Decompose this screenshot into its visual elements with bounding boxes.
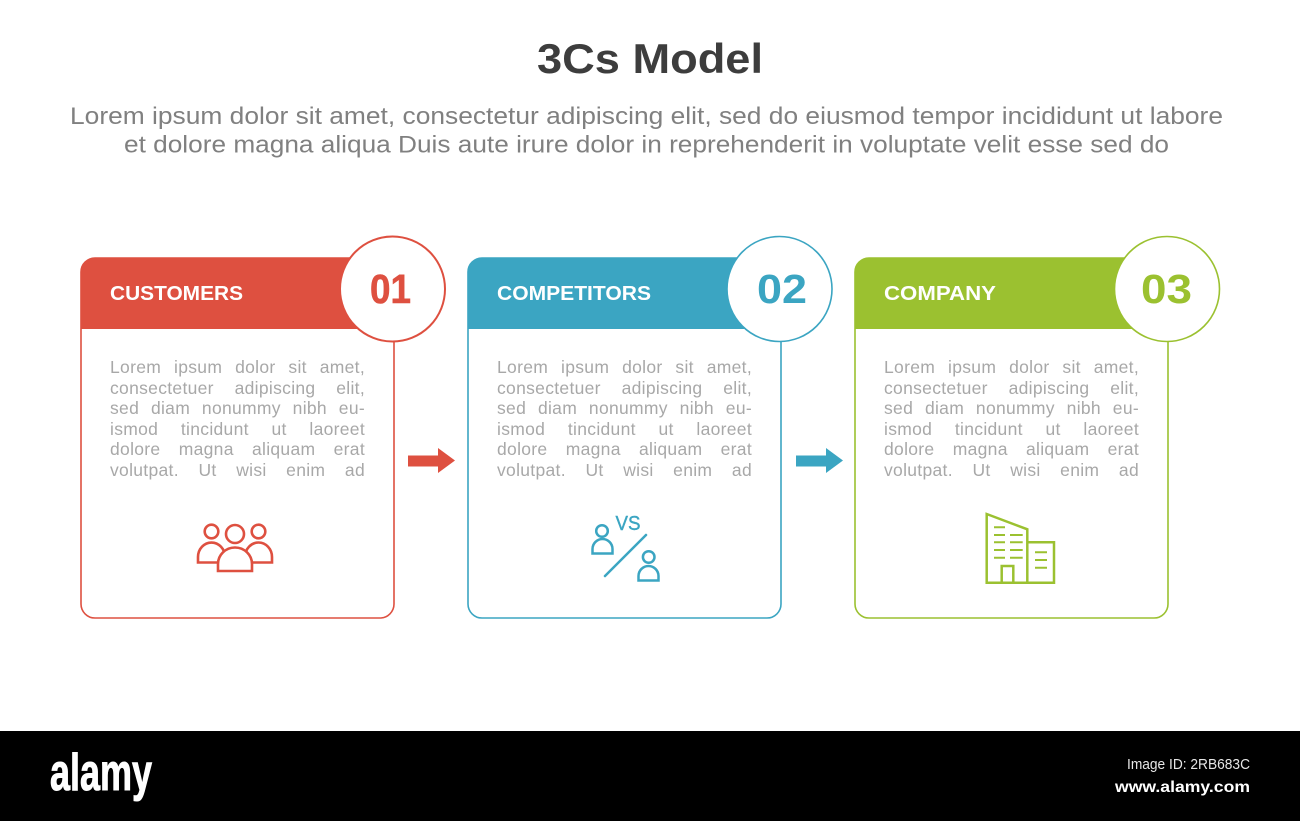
company body text	[884, 357, 1139, 480]
panel: company: COMPANY	[884, 282, 996, 305]
competitors body text: Lorem ipsum dolor sit amet,	[497, 357, 752, 377]
arrow: customers to competitors	[408, 448, 455, 473]
panel: customers: CUSTOMERS	[110, 282, 243, 305]
subtitle text block: Lorem ipsum dolor sit amet, consectetur adipiscing elit, sed do eiusmod tempor incididunt ut labore	[70, 103, 1223, 130]
panel: company: 03	[1141, 266, 1192, 312]
competitors body text: volutpat. Ut wisi enim ad	[497, 460, 752, 480]
subtitle text block: et dolore magna aliqua Duis aute irure dolor in reprehenderit in voluptate velit esse sed do	[124, 132, 1169, 158]
competitors body text	[497, 357, 752, 480]
competitors body text: sed diam nonummy nibh eu-	[497, 398, 752, 418]
company body text: Lorem ipsum dolor sit amet,	[884, 357, 1139, 377]
company body text: sed diam nonummy nibh eu-	[884, 398, 1139, 418]
customers body text: sed diam nonummy nibh eu-	[110, 398, 365, 418]
customers body text: volutpat. Ut wisi enim ad	[110, 460, 365, 480]
panel: customers: 01	[370, 266, 411, 312]
subtitle text block	[70, 103, 1223, 158]
footer bar: www.alamy.com	[1114, 779, 1250, 796]
footer bar: Image ID: 2RB683C	[1127, 756, 1250, 773]
customers body text: dolore magna aliquam erat	[110, 439, 365, 459]
company body text: consectetuer adipiscing elit,	[884, 378, 1139, 398]
company body text: volutpat. Ut wisi enim ad	[884, 460, 1139, 480]
competitors body text: dolore magna aliquam erat	[497, 439, 752, 459]
panel: competitors: VS	[616, 513, 640, 535]
competitors body text: consectetuer adipiscing elit,	[497, 378, 752, 398]
company body text: dolore magna aliquam erat	[884, 439, 1139, 459]
panel: competitors	[467, 236, 833, 619]
title: 3Cs Model	[537, 35, 763, 82]
panel: competitors: COMPETITORS	[497, 282, 651, 305]
customers body text	[110, 357, 365, 480]
footer bar	[0, 731, 1300, 821]
panel: company	[854, 236, 1220, 619]
panel: competitors: 02	[757, 266, 807, 312]
footer bar: alamy	[50, 744, 152, 802]
customers body text: Lorem ipsum dolor sit amet,	[110, 357, 365, 377]
competitors body text: ismod tincidunt ut laoreet	[497, 418, 752, 438]
customers body text: ismod tincidunt ut laoreet	[110, 418, 365, 438]
company body text: ismod tincidunt ut laoreet	[884, 418, 1139, 438]
panel: customers	[80, 236, 446, 619]
customers body text: consectetuer adipiscing elit,	[110, 378, 365, 398]
arrow: competitors to company	[796, 448, 843, 473]
